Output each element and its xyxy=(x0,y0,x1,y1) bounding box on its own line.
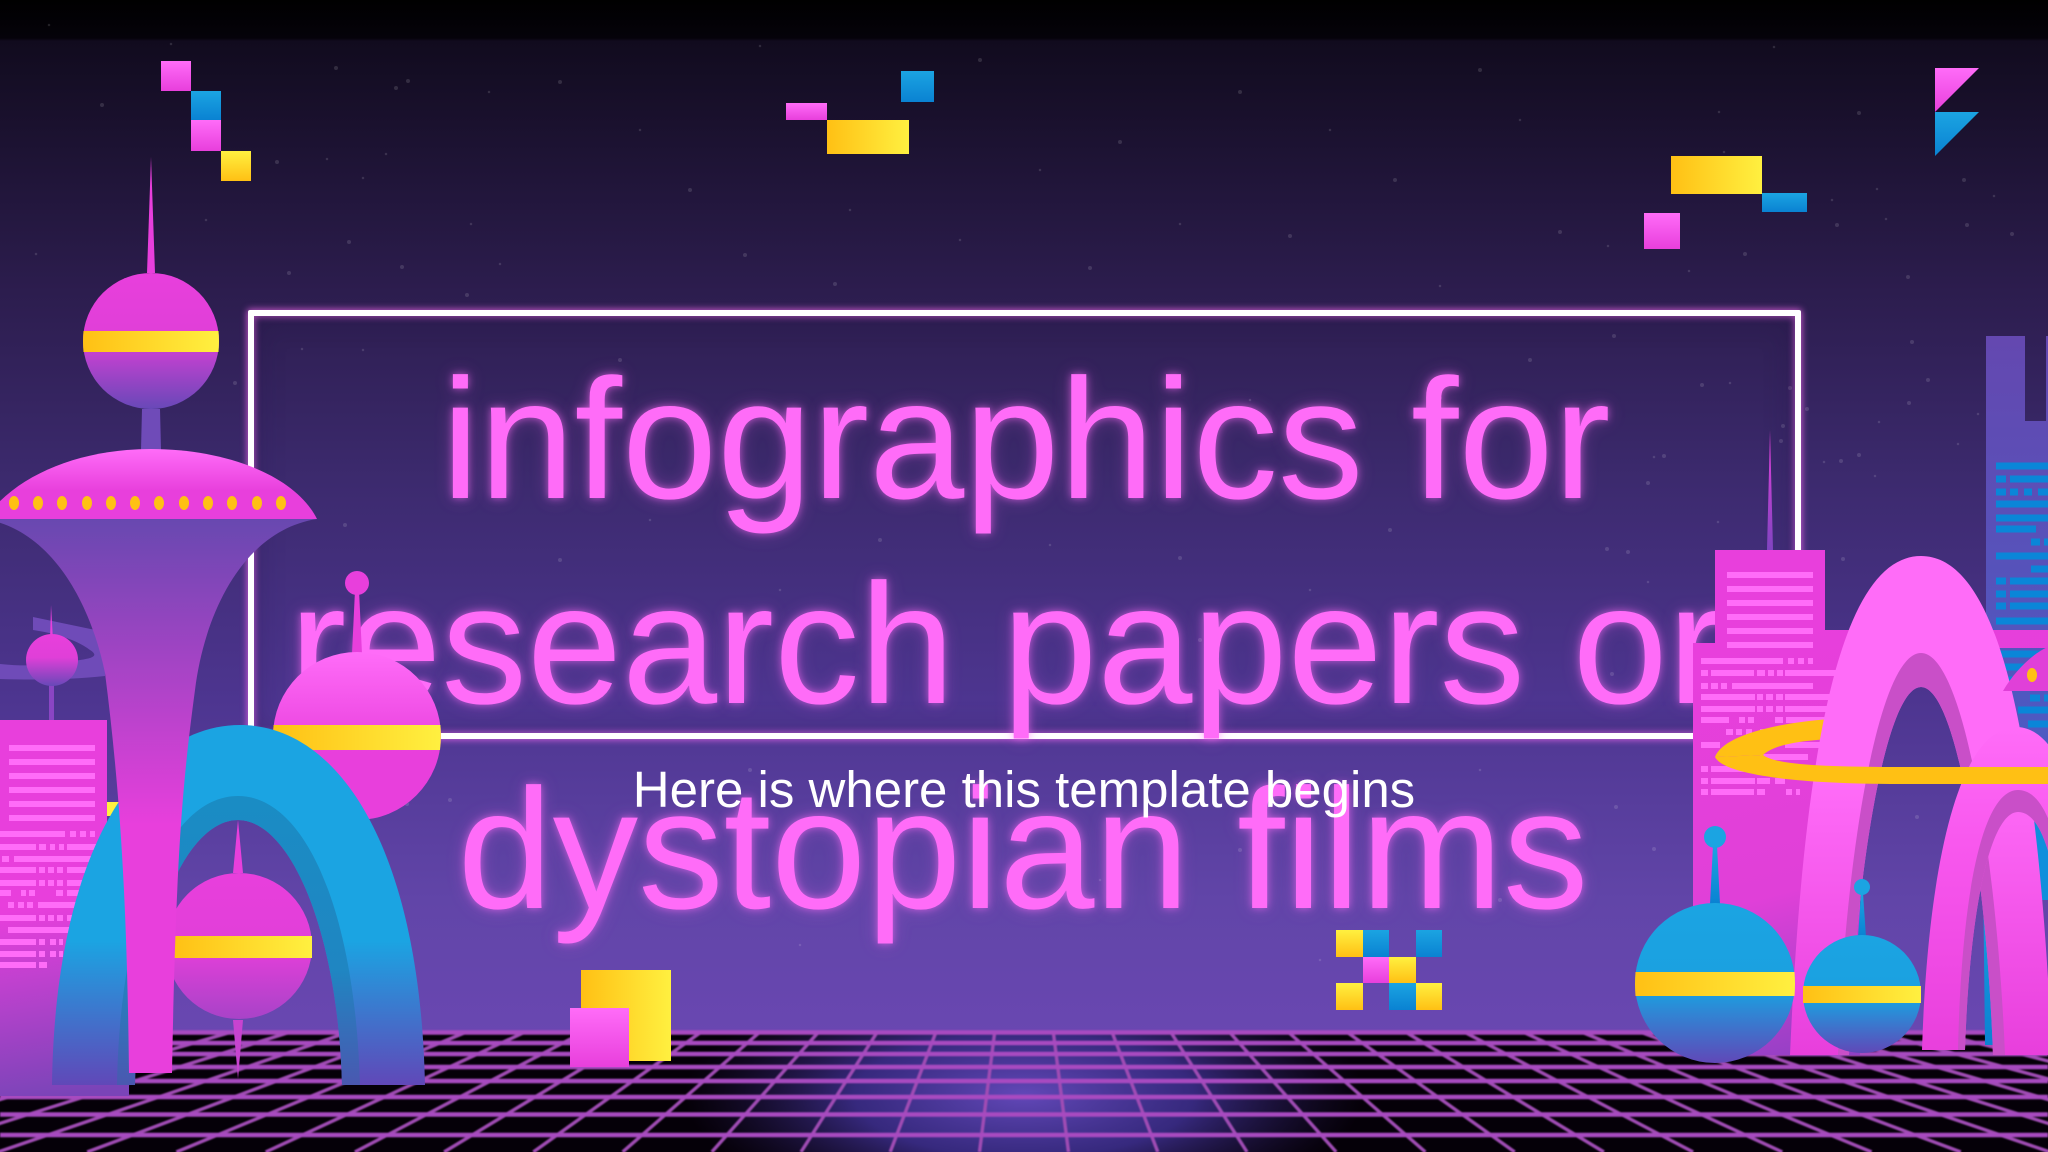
blue sliver behind arches xyxy=(1983,867,1993,1045)
back purple tower xyxy=(1986,336,2048,900)
pixels: yellow and pink blocks xyxy=(570,970,671,1067)
title line 2: research papers or xyxy=(289,549,1725,740)
small pink arch xyxy=(1922,727,2048,1055)
title xyxy=(289,344,1725,950)
space needle tower xyxy=(0,157,317,1073)
small sphere inside arch xyxy=(166,820,312,1079)
yellow ring: back half xyxy=(1715,719,1830,757)
pink skyscraper xyxy=(1693,430,2048,1055)
blue arch xyxy=(52,725,425,1085)
left building xyxy=(0,720,129,1096)
large blue sphere xyxy=(1635,826,1795,1063)
pixels: checker cross xyxy=(1336,930,1442,1010)
triangles: top right xyxy=(1935,68,1979,156)
pixels: top left xyxy=(161,61,251,181)
small blue sphere xyxy=(1803,879,1921,1053)
title line 3: dystopian films xyxy=(458,754,1588,945)
neon title frame xyxy=(248,310,1801,739)
back sphere with ring xyxy=(0,605,105,720)
pixels: top centre xyxy=(786,71,934,154)
left city xyxy=(0,157,441,1096)
pixels: top right cluster xyxy=(1644,156,1807,249)
big pink arch xyxy=(1790,556,2048,1055)
right city xyxy=(1635,336,2048,1063)
large pink sphere xyxy=(273,571,441,820)
subtitle: Here is where this template begins xyxy=(633,761,1415,818)
saucer lights xyxy=(9,496,286,510)
yellow ring: front half xyxy=(1715,755,2048,784)
right saucer xyxy=(2003,647,2048,691)
floor xyxy=(0,1032,2048,1152)
stars xyxy=(36,25,2012,960)
title line 1: infographics for xyxy=(441,344,1611,535)
